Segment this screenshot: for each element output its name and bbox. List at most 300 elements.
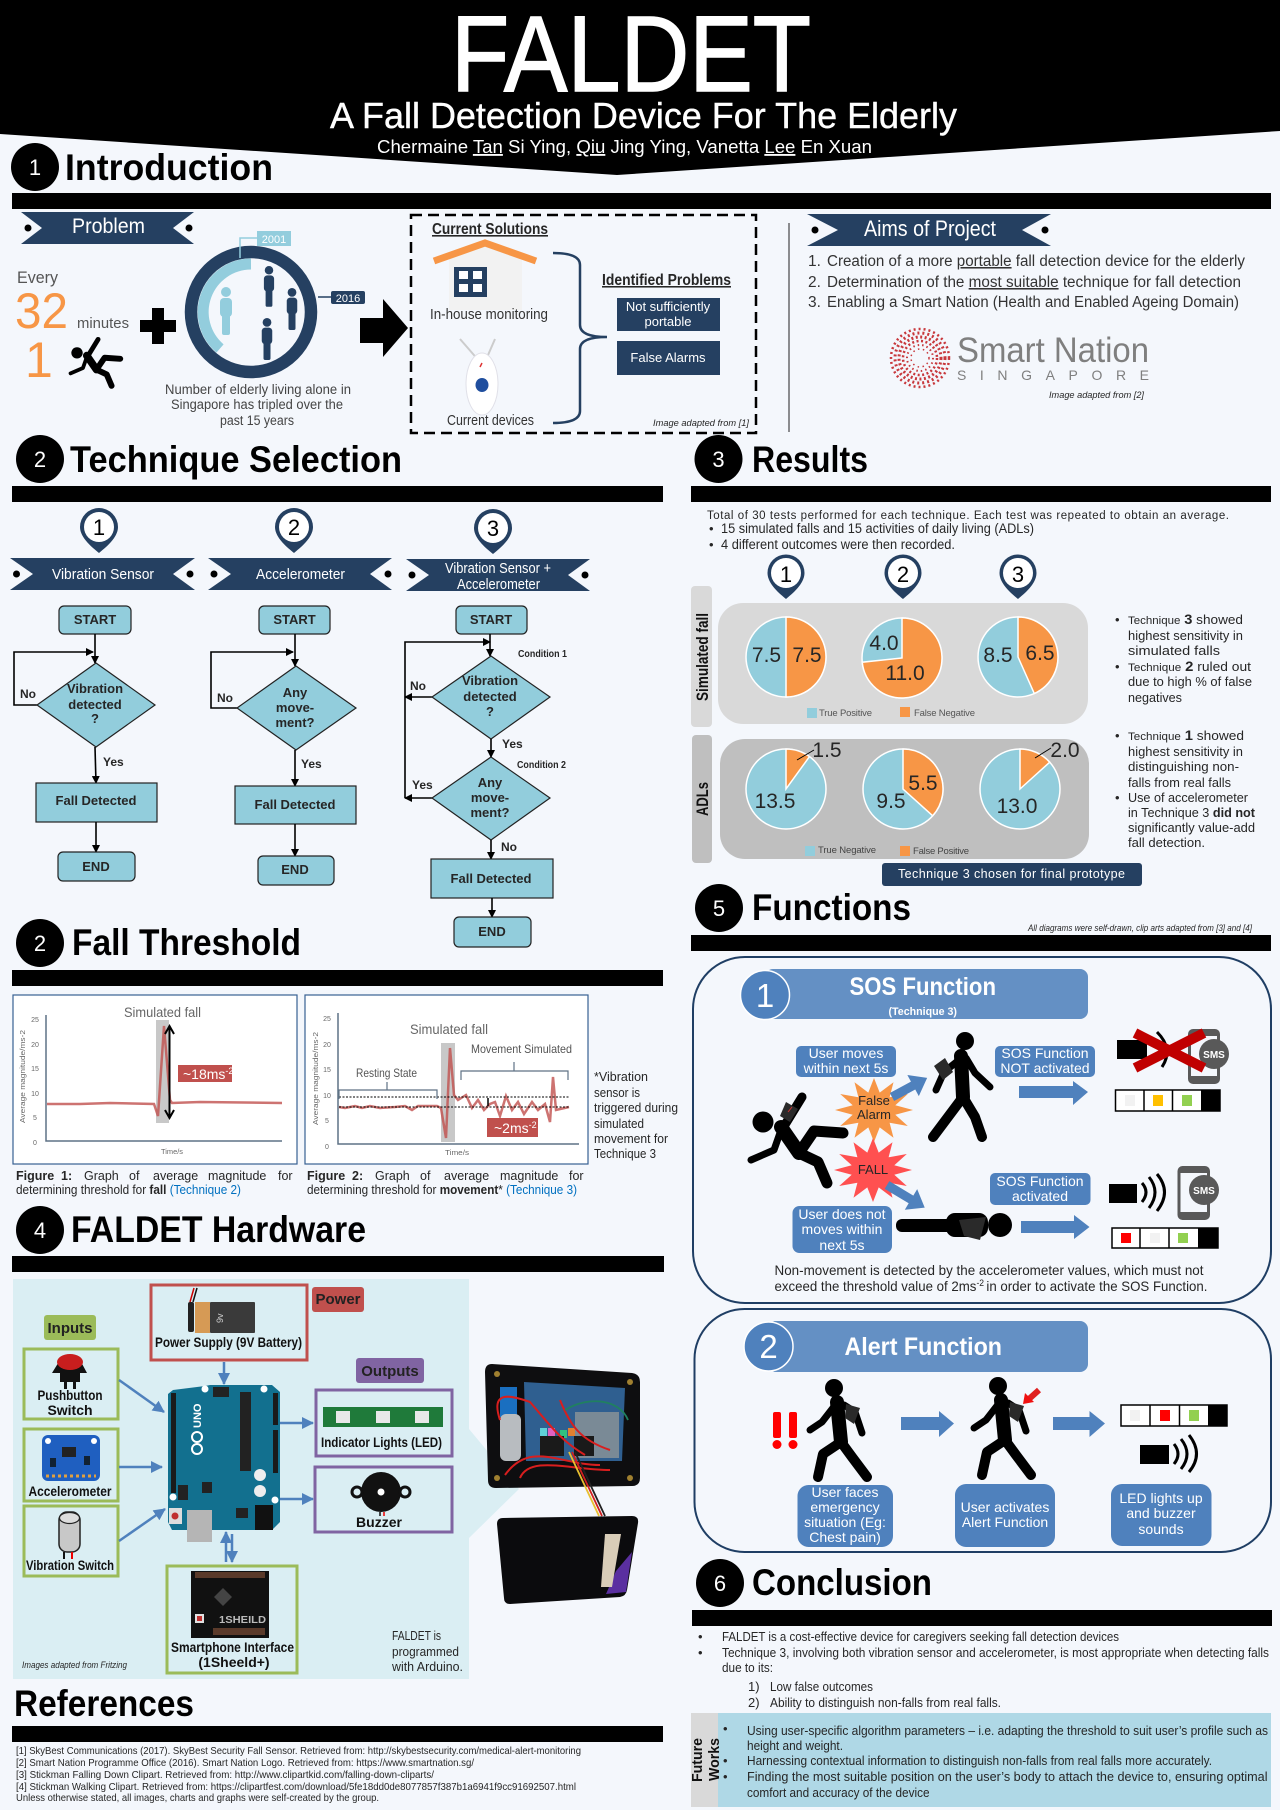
label: user activates alert: User activates [961,1499,1049,1515]
pin: technique 1 [80,508,118,553]
flowchart: technique 2 [211,606,356,885]
logo: smart nation singapore: Smart Nation [957,331,1149,370]
burst: false alarm: False [858,1093,890,1108]
flowchart: technique 1: detected [68,697,122,712]
caption: figure 1: of [129,1169,140,1183]
pin: result 2 [884,554,922,599]
flowchart: technique 3: Yes [412,778,433,792]
flowchart: technique 2: No [217,691,233,705]
text: non-movement explanation: in order to activate the SOS Function. [986,1278,1208,1294]
label: power [312,1287,364,1312]
ribbon: vibration sensor plus accelerometer [406,559,590,593]
label: inputs [44,1315,96,1340]
pie: technique 2 simulated fall: 4.0 [869,632,899,655]
heading: fall threshold: 2 [34,931,46,956]
heading: fall threshold [12,919,663,986]
chart: figure 2 threshold for movement: ~2ms [494,1120,529,1136]
problem box: not sufficiently portable [617,298,720,331]
heading: functions [691,884,1271,951]
flowchart: technique 3: move- [471,790,509,805]
findings: simulated fall: Technique 3 showed [1128,611,1243,627]
heading: results: Results [752,439,868,480]
note: vibration sensor: movement for [594,1131,669,1146]
reference list: [1] SkyBest Communications (2017). SkyBest Security Fall Sensor. Retrieved from: http://skybestsecurity.com/medical-alert-monitoring [16,1745,581,1757]
text: conclusion points: 1) [748,1679,760,1694]
list: aims: 2. [808,274,821,291]
findings: adls: Technique 1 showed [1128,727,1244,743]
pie: technique 1 adls: 1.5 [812,739,842,762]
header: sos function: SOS Function [850,973,996,1001]
reference list: [4] Stickman Walking Clipart. Retrieved from: https://clipartfest.com/download/5fe18dd0de8077857f387b1a6941f9cc91692507.html [16,1781,576,1793]
logo: smart nation singapore: SINGAPORE [957,367,1149,383]
arrow: to activation [901,1411,954,1437]
findings: simulated fall: highest sensitivity in [1128,628,1243,643]
pin: technique 2 [275,508,313,553]
caption: elderly living alone: Number of elderly living alone in [165,382,351,397]
pie: technique 3 simulated fall: 8.5 [983,644,1013,667]
caption: figure 1: 1: [61,1169,72,1183]
label: user faces emergency [798,1484,893,1547]
heading: conclusion: 6 [714,1571,726,1596]
label: user activates alert [955,1484,1055,1547]
pie: technique 3 simulated fall: 6.5 [1025,642,1055,665]
pin: result 2: 2 [897,562,909,587]
arrow: to lying [881,1175,931,1218]
icon: house [434,243,536,310]
findings: adls: fall detection. [1128,835,1205,850]
pin: technique 2: 2 [288,515,300,540]
note: vibration sensor [594,1069,678,1161]
caption: figure 2: Figure [307,1169,345,1183]
flowchart: technique 3: Vibration [462,673,518,688]
reference list: [3] Stickman Falling Down Clipart. Retrieved from: http://www.clipartkid.com/falling-down-cliparts/ [16,1769,434,1781]
heading: results [691,435,1271,502]
section: faldet hardware [12,1206,664,1679]
caption: figure 2 [307,1169,584,1197]
section: introduction [11,143,1271,433]
logo: smart nation singapore: Image adapted from [2] [1049,390,1144,401]
heading: introduction [11,143,1271,209]
title banner [0,0,1280,175]
smartphone interface: (1Sheeld+) [198,1654,270,1670]
burst: fall [834,1138,912,1202]
header: sos function: 1 [756,977,774,1014]
list: aims: Creation of a more portable fall detection device for the elderly [827,253,1245,270]
panel: future works [689,1713,1271,1807]
heading: faldet hardware: 4 [34,1218,46,1243]
icon: buzzer and sms [1109,1166,1219,1220]
note: vibration sensor: Technique 3 [594,1146,656,1161]
caption: figure 2: 2: [352,1169,363,1183]
icon: muted buzzer and sms [1117,1029,1229,1084]
text: test description: Total of 30 tests performed for each technique. Each test was repeated to obtain an average. [707,510,1229,522]
heading: references [12,1683,663,1742]
chart: elderly living alone ring: 2016 [336,293,360,305]
pie: technique 1 simulated fall: 7.5 [792,644,822,667]
pie: technique 2 simulated fall [862,618,942,698]
pie: technique 3 adls: 2.0 [1050,739,1080,762]
label: user activates alert: Alert Function [962,1514,1048,1530]
pie: technique 1 adls [746,739,842,829]
power supply [151,1285,307,1360]
flowchart: technique 3: ment? [470,805,510,820]
findings: simulated fall: simulated falls [1128,643,1221,658]
input: vibration switch [24,1506,118,1576]
flowchart: technique 1: Vibration [67,681,123,696]
ribbon: vibration sensor: Vibration Sensor [52,566,154,583]
flowchart: technique 3: detected [463,689,517,704]
bracket [553,253,607,423]
figure: walking person [933,1032,990,1137]
caption: figure 2: magnitude [500,1169,558,1183]
output: buzzer: Buzzer [356,1514,402,1530]
pie: technique 2 adls: 5.5 [908,772,938,795]
ribbon: problem: Problem [72,215,145,238]
problem box: false alarms: False Alarms [630,350,706,365]
flowchart: technique 1: Yes [103,755,124,769]
flowchart: technique 2: END [281,862,309,877]
heading: technique selection: 2 [34,447,46,472]
input: accelerometer [24,1429,118,1501]
label: adls: ADLs [693,782,712,816]
text: conclusion points [698,1629,1269,1710]
heading: faldet hardware: FALDET Hardware [71,1209,366,1250]
label: led and buzzer [1111,1484,1212,1546]
banner: technique 3 chosen: Technique 3 chosen for final prototype [898,867,1125,881]
caption: figure 1: for [278,1169,293,1183]
caption: figure 1: average [153,1169,198,1183]
label: user does not move [792,1206,892,1253]
label: sos activated [990,1173,1090,1205]
pin: technique 3 [474,509,512,554]
icon: buzzer sounding [1140,1435,1196,1472]
panel: alert function [694,1309,1271,1552]
pin: technique 1: 1 [93,515,105,540]
flowchart: technique 3 [405,606,567,947]
photo: device internals [485,1364,640,1488]
flowchart: technique 2: Fall Detected [255,797,336,812]
reference list [16,1745,581,1804]
section: functions [691,884,1271,1552]
input: pushbutton switch [24,1349,118,1419]
pie: technique 2 adls [863,749,943,829]
chart: figure 2 threshold for movement [305,995,588,1164]
chart: figure 2 threshold for movement: 20 [323,1042,331,1049]
heading: technique selection: Technique Selection [70,439,402,480]
label: user faces emergency: Chest pain) [809,1529,881,1545]
chart: figure 1 threshold for fall: Simulated fall [124,1004,201,1020]
section: fall threshold [12,919,678,1197]
panel: current solutions: Identified Problems [602,272,731,289]
text: conclusion points: FALDET is a cost-effective device for caregivers seeking fall detection devices [722,1629,1119,1644]
heading: functions: Functions [752,887,911,928]
heading: conclusion [692,1559,1272,1626]
input: vibration switch: Vibration Switch [26,1557,114,1573]
pin: technique 3: 3 [487,516,499,541]
text: test description: 4 different outcomes were then recorded. [721,537,955,552]
problem box: not sufficiently portable: portable [645,314,691,329]
flowchart: technique 3: Condition 1 [518,648,567,660]
panel: current solutions: Image adapted from [1] [653,418,749,429]
section: conclusion [689,1559,1272,1807]
flowchart: technique 3: Yes [502,737,523,751]
problem box: false alarms [617,341,720,375]
list: aims: 3. [808,294,821,311]
flowchart: technique 3: Condition 2 [517,759,566,771]
label: adls [692,735,712,863]
flowchart: technique 3: Any [478,775,503,790]
icon: falling person [71,339,120,386]
panel: future works: • [723,1721,728,1736]
caption: figure 1: magnitude [208,1169,266,1183]
statistic: every 32 minutes: 1 [25,332,53,388]
statistic: every 32 minutes: 32 [15,283,68,339]
flowchart: technique 1: START [74,612,116,627]
pie: technique 1 simulated fall: 7.5 [752,644,781,667]
ribbon: vibration sensor plus accelerometer: Vibration Sensor + [445,561,551,577]
smartphone interface [167,1566,297,1673]
heading: references: References [14,1683,194,1724]
statistic: every 32 minutes [15,268,129,388]
heading: introduction: Introduction [65,147,273,188]
caption: figure 2: Graph [375,1169,410,1183]
icon: plus [140,308,176,344]
flowchart: technique 1 [14,606,157,881]
header: sos function [740,969,1088,1020]
led strip: sos not activated [1116,1090,1220,1111]
chart: figure 2 threshold for movement: -2 [529,1120,537,1130]
chart: figure 2 threshold for movement: Movement Simulated [471,1042,572,1056]
chart: figure 2 threshold for movement: Average magnitude/ms-2 [311,1032,320,1125]
label: outputs [356,1358,424,1383]
chart: figure 2 threshold for movement: 15 [323,1067,331,1074]
arrow: not activated outcome [1019,1081,1088,1105]
text: non-movement explanation: -2 [976,1278,986,1288]
ribbon: aims of project: Aims of Project [864,216,996,241]
flowchart: technique 3: START [470,612,512,627]
label: user moves: within next 5s [803,1060,888,1076]
text: test description [707,510,1229,552]
chart: figure 2 threshold for movement: 0 [325,1144,329,1151]
figure: falling person with device [751,1097,843,1183]
flowchart: technique 1: Fall Detected [56,793,137,808]
caption: figure 1: Figure [16,1169,54,1183]
pie: technique 1 simulated fall [746,617,826,697]
flowchart: technique 1: No [20,687,36,701]
arrow: to led and buzzer [1053,1411,1105,1437]
chart: figure 2 threshold for movement: Resting State [356,1066,417,1080]
panel: sos function [693,957,1271,1303]
heading: results: 3 [712,447,725,472]
label: simulated fall: Simulated fall [693,613,712,701]
power supply: Power Supply (9V Battery) [155,1334,302,1350]
arrow: to walking [886,1067,933,1108]
smartphone interface: Smartphone Interface [171,1639,294,1655]
ribbon: problem [21,212,194,244]
note: programmed with arduino [391,1628,463,1674]
note: programmed with arduino: programmed [392,1644,459,1659]
legend: simulated fall [807,707,975,719]
chart: figure 2 threshold for movement: Simulated fall [410,1021,488,1037]
chart: figure 1 threshold for fall: 0 [33,1140,37,1147]
statistic: every 32 minutes: minutes [77,315,129,332]
caption: figure 2: of [420,1169,431,1183]
pie: technique 3 simulated fall [978,617,1058,697]
findings: simulated fall: • [1115,612,1120,627]
panel: simulated fall pies [718,603,1088,724]
list: aims [808,253,1245,311]
legend: simulated fall: True Positive [819,708,872,719]
text: test description: 15 simulated falls and 15 activities of daily living (ADLs) [721,521,1034,536]
reference list: [2] Smart Nation Programme Office (2016). Smart Nation Logo. Retrieved from: https://www.smartnation.sg/ [16,1757,474,1769]
panel: adls pies [720,739,1089,859]
icon: pendant [460,339,498,415]
authors: Chermaine Tan Si Ying, Qiu Jing Ying, Vanetta Lee En Xuan [377,136,872,157]
header: alert function: 2 [759,1328,778,1365]
text: conclusion points: Ability to distinguish non-falls from real falls. [770,1695,1001,1710]
pin: result 1 [768,554,804,599]
text: non-movement explanation [774,1262,1208,1294]
label: inputs: Inputs [48,1320,92,1337]
flowchart: technique 2: move- [276,700,314,715]
note: image credit: Images adapted from Fritzing [22,1660,128,1671]
legend: adls: False Positive [913,846,969,857]
chart: figure 1 threshold for fall: ~18ms [183,1066,225,1082]
panel: future works: Future [689,1738,706,1782]
figure: person in emergency [810,1379,867,1477]
label: user faces emergency: situation (Eg: [804,1514,886,1530]
caption: figure 1: Graph [84,1169,119,1183]
heading: technique selection [12,435,663,502]
label: outputs: Outputs [361,1363,419,1380]
panel: current solutions: Current devices [447,413,534,429]
label: led and buzzer: and buzzer [1126,1505,1196,1521]
label: user moves [796,1045,896,1077]
pie: technique 3 adls [980,739,1080,829]
banner: technique 3 chosen [882,863,1142,886]
caption: elderly living alone: Singapore has tripled over the [171,397,343,412]
ribbon: vibration sensor [10,558,195,590]
findings: simulated fall: due to high % of false [1128,674,1252,689]
flowchart: technique 1: ? [91,711,99,726]
input: pushbutton switch: Switch [47,1402,93,1418]
findings: adls: • [1115,728,1120,743]
burst: false alarm [835,1078,913,1142]
reference list: Unless otherwise stated, all images, charts and graphs were self-created by the group. [16,1792,379,1804]
output: buzzer [315,1467,452,1532]
label: power: Power [315,1291,361,1308]
led strip: alert [1121,1405,1227,1426]
burst: fall: FALL [858,1162,888,1177]
logo: smart nation singapore [891,329,1149,401]
findings: adls: significantly value-add [1128,820,1255,835]
panel: future works: Harnessing contextual information to distinguish non-falls from real falls more accurately. [747,1753,1212,1768]
icon: buzzer and sms: SMS [1193,1186,1215,1197]
arrows: hardware connections [119,1362,313,1562]
chart: elderly living alone ring [191,231,365,372]
findings: adls: highest sensitivity in [1128,744,1243,759]
ribbon: aims of project [807,214,1051,246]
section: results [691,435,1271,886]
label: led and buzzer: LED lights up [1119,1490,1203,1506]
chart: figure 2 threshold for movement: 25 [323,1016,331,1023]
panel: hardware background [13,1279,519,1679]
label: user moves: User moves [809,1045,883,1061]
panel: current solutions [411,215,756,433]
chart: figure 1 threshold for fall: -2 [225,1066,233,1076]
findings: adls: • [1115,790,1120,805]
text: conclusion points: due to its: [722,1660,773,1675]
statistic: every 32 minutes: Every [17,268,58,287]
section: technique selection [10,435,663,947]
arrow: activated outcome [1021,1215,1090,1239]
panel: current solutions: In-house monitoring [430,307,548,323]
findings: adls: falls from real falls [1128,775,1231,790]
panel: future works: • [723,1753,728,1768]
panel: future works: comfort and accuracy of the device [747,1785,930,1800]
heading: faldet hardware [12,1206,664,1272]
chart: figure 2 threshold for movement: Time/s [445,1148,469,1157]
caption: elderly living alone: past 15 years [220,413,294,428]
label: sos not activated [995,1045,1095,1077]
output: indicator lights [316,1390,452,1456]
section: references [12,1683,663,1804]
findings: adls: Use of accelerometer [1128,790,1249,805]
list: aims: Determination of the most suitable technique for fall detection [827,274,1241,291]
list: aims: 1. [808,253,821,270]
chart: figure 1 threshold for fall: 10 [31,1091,39,1098]
flowchart: technique 3: No [501,840,517,854]
label: sos not activated: NOT activated [1000,1060,1090,1076]
panel: future works: Works [706,1738,723,1781]
header: alert function: Alert Function [844,1333,1002,1361]
heading: fall threshold: Fall Threshold [72,922,301,963]
text: test description: • [709,521,714,536]
arrow: to current solutions [360,299,408,357]
flowchart: technique 3: END [478,924,506,939]
chart: figure 1 threshold for fall: 15 [31,1066,39,1073]
pin: result 3: 3 [1012,562,1024,587]
smartphone interface: 1SHEILD [219,1615,266,1626]
flowchart: technique 2: START [273,612,316,627]
note: programmed with arduino: with Arduino. [391,1659,463,1674]
findings: simulated fall: Technique 2 ruled out [1128,658,1251,674]
panel: current solutions: Current Solutions [432,221,548,238]
text: conclusion points: • [698,1645,703,1660]
pie: technique 2 simulated fall: 11.0 [885,662,925,685]
text: conclusion points: • [698,1629,703,1644]
flowchart: technique 1: END [82,859,110,874]
pie: technique 3 adls: 13.0 [997,795,1037,818]
chart: figure 1 threshold for fall: 5 [33,1115,37,1122]
input: pushbutton switch: Pushbutton [38,1387,102,1403]
figure: lying person [896,1213,1012,1240]
chart: figure 1 threshold for fall: 25 [31,1017,39,1024]
caption: figure 1: determining threshold for fall (Technique 2) [16,1183,241,1197]
ribbon: accelerometer [208,558,392,590]
findings: adls [1115,727,1256,850]
flowchart: technique 2: Any [283,685,308,700]
header: sos function: (Technique 3) [888,1006,957,1018]
text: non-movement explanation: Non-movement is detected by the accelerometer values, which must not [774,1262,1204,1278]
caption: figure 2: determining threshold for movement* (Technique 3) [307,1183,577,1197]
legend: adls [805,845,969,857]
flowchart: technique 3: Fall Detected [451,871,532,886]
label: sos not activated: SOS Function [1001,1045,1089,1061]
input: accelerometer: Accelerometer [28,1483,112,1499]
findings: simulated fall: negatives [1128,690,1182,705]
caption: figure 1 [16,1169,293,1197]
